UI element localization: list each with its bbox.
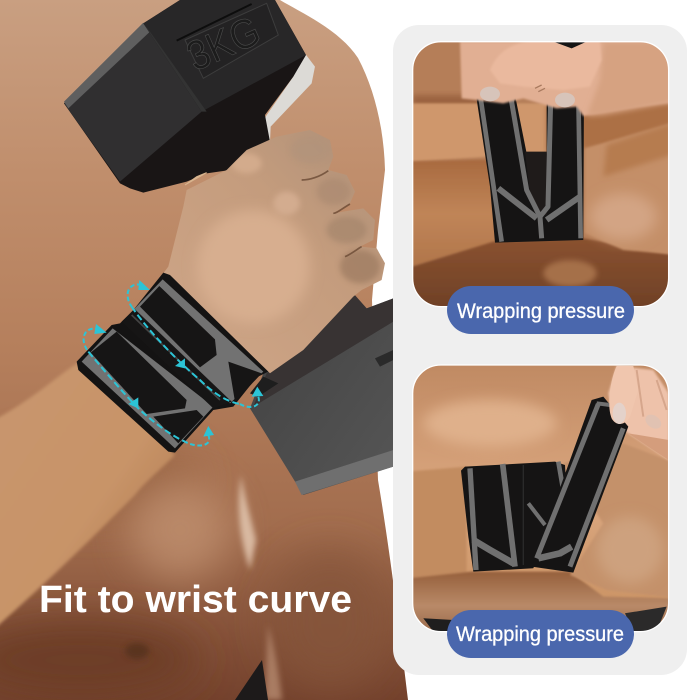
pill label: bottom: Wrapping pressure — [456, 623, 624, 646]
hand fist — [163, 130, 385, 373]
weight label: 3KG — [180, 6, 267, 80]
dumbbell lower head — [250, 293, 393, 495]
pill label: top: Wrapping pressure — [457, 300, 625, 323]
finger nails — [480, 87, 500, 101]
caption: Fit to wrist curve — [39, 579, 352, 621]
wrap — [461, 397, 628, 573]
pill label: bottom — [447, 610, 634, 658]
hand — [608, 366, 669, 460]
long strap — [532, 397, 628, 573]
right panel background — [393, 25, 687, 675]
dumbbell upper head — [64, 0, 315, 193]
handle highlight — [260, 53, 315, 143]
strap — [476, 87, 584, 243]
torso — [0, 0, 420, 700]
finger over strap — [609, 366, 634, 424]
finger nail — [613, 403, 626, 424]
wrist wrap — [77, 273, 268, 453]
left facet — [64, 23, 202, 182]
shorts — [423, 618, 453, 632]
panel: photo top — [407, 42, 677, 313]
head base — [64, 0, 306, 193]
panel: photo bottom — [407, 365, 677, 640]
right facet — [143, 0, 306, 112]
hands on top — [460, 42, 677, 116]
pill label: top — [447, 286, 634, 334]
wrap grey trim — [133, 279, 263, 403]
weight plate — [185, 3, 278, 78]
wrap black patches — [91, 286, 262, 443]
arm forearm — [0, 362, 175, 650]
cyan dashed arrows — [84, 284, 259, 446]
main photo: torso with arm and dumbbell — [0, 0, 420, 700]
